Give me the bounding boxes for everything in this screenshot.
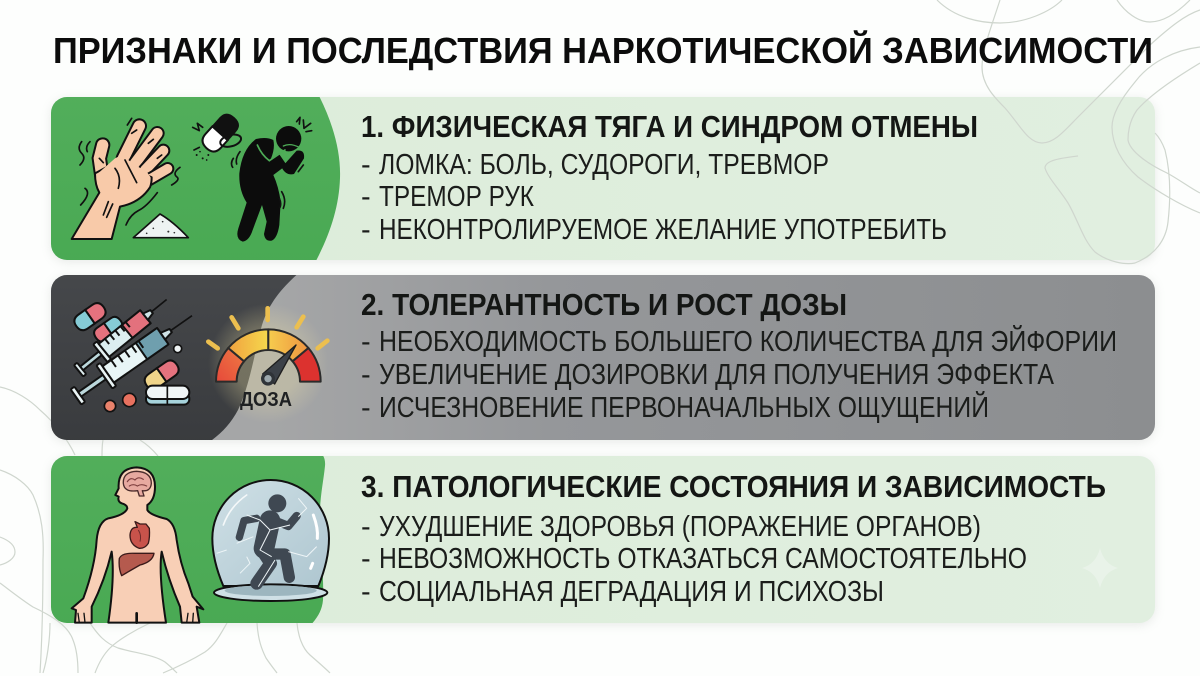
gauge label: ДОЗА <box>240 389 292 411</box>
panel 3 item: inability to quit: НЕВОЗМОЖНОСТЬ ОТКАЗАТЬСЯ САМОСТОЯТЕЛЬНО <box>379 543 1027 575</box>
panel 2 heading: 2. ТОЛЕРАНТНОСТЬ И РОСТ ДОЗЫ <box>361 287 847 322</box>
loose pills <box>174 345 182 353</box>
panel 2 dark icon area <box>51 275 296 440</box>
panel 3 item: social degradation: СОЦИАЛЬНАЯ ДЕГРАДАЦИЯ И ПСИХОЗЫ <box>379 576 884 608</box>
icon: capsule <box>193 110 243 161</box>
panel shadows <box>51 99 1155 625</box>
icon: runner trapped in cracked glass dome <box>212 480 329 601</box>
cracks <box>217 498 317 587</box>
panel 3 item: health decline: - <box>361 511 371 543</box>
panel 2 item: lost sensations: - <box>361 392 371 424</box>
panel 2 item: larger amount: - <box>361 326 371 358</box>
panel 2 item: lost sensations: ИСЧЕЗНОВЕНИЕ ПЕРВОНАЧАЛЬНЫХ ОЩУЩЕНИЙ <box>379 390 989 424</box>
panel 3 item: social degradation: - <box>361 576 371 608</box>
panel 2 item: dosage increase: УВЕЛИЧЕНИЕ ДОЗИРОВКИ ДЛЯ ПОЛУЧЕНИЯ ЭФФЕКТА <box>379 359 1055 391</box>
icon: dose gauge <box>208 303 328 423</box>
runner <box>239 516 297 583</box>
panel 2: tolerance and dose growth <box>40 270 1155 445</box>
icon: syringes and pills <box>68 291 200 412</box>
powder pile <box>133 214 188 238</box>
panel 1 item: tremor: - <box>361 181 371 213</box>
panel 1 item: tremor: ТРЕМОР РУК <box>379 181 534 213</box>
title: ПРИЗНАКИ И ПОСЛЕДСТВИЯ НАРКОТИЧЕСКОЙ ЗАВИСИМОСТИ <box>53 29 1153 71</box>
panel 1 item: craving: НЕКОНТРОЛИРУЕМОЕ ЖЕЛАНИЕ УПОТРЕБИТЬ <box>379 214 947 246</box>
panel 1 item: withdrawal: - <box>361 149 371 181</box>
icon: trembling hand <box>72 118 188 239</box>
panel 3 green icon area <box>51 456 326 623</box>
capsule top <box>72 300 108 333</box>
sparkle <box>1082 548 1118 588</box>
panel 1 item: craving: - <box>361 214 371 246</box>
icon: bent-over person <box>231 117 312 242</box>
panel 3: pathological states and addiction <box>40 450 1118 630</box>
panel 1 heading: 1. ФИЗИЧЕСКАЯ ТЯГА И СИНДРОМ ОТМЕНЫ <box>361 109 978 144</box>
panel 1 item: withdrawal: ЛОМКА: БОЛЬ, СУДОРОГИ, ТРЕВМОР <box>379 149 829 181</box>
icon: human body with organs <box>72 467 203 623</box>
panel 2 item: dosage increase: - <box>361 359 371 391</box>
panel 3 light background <box>51 456 1155 623</box>
panel 1 green icon area <box>51 97 340 260</box>
panel 3 item: health decline: УХУДШЕНИЕ ЗДОРОВЬЯ (ПОРАЖЕНИЕ ОРГАНОВ) <box>379 511 981 543</box>
panel 3 heading: 3. ПАТОЛОГИЧЕСКИЕ СОСТОЯНИЯ И ЗАВИСИМОСТЬ <box>361 469 1106 504</box>
panel 1: physical craving and withdrawal <box>51 97 976 260</box>
liver <box>119 553 154 576</box>
syringe 2 <box>68 304 200 408</box>
panel 1 light background <box>51 97 1155 260</box>
brain <box>123 471 151 496</box>
panel 2 grey background <box>51 275 1155 440</box>
panel 3 item: inability to quit: - <box>361 543 371 575</box>
syringe 1 <box>71 291 174 380</box>
heart <box>130 522 150 548</box>
